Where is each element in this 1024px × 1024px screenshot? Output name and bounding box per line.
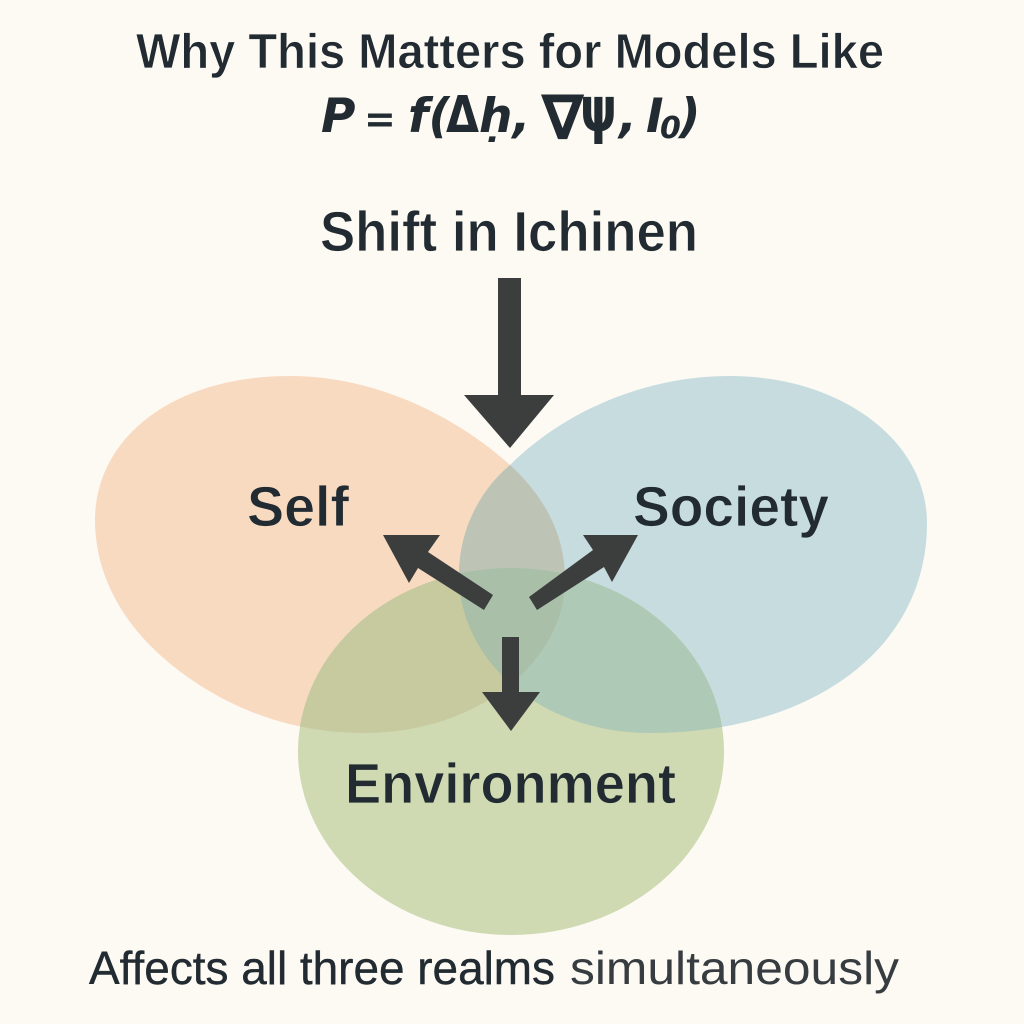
title: I — [646, 89, 664, 144]
caption: simultaneously — [570, 942, 899, 994]
title: , — [617, 89, 637, 144]
overlap: self and environment — [300, 580, 502, 733]
title: ) — [677, 89, 700, 144]
overlap: self and society — [459, 465, 565, 573]
arrow: to society — [529, 535, 638, 610]
arrow: to environment — [482, 637, 540, 731]
circle: society — [459, 376, 927, 733]
title: f( — [408, 89, 450, 144]
title: = — [364, 97, 396, 141]
title: P — [321, 89, 355, 144]
circle: environment — [298, 568, 724, 935]
label: environment: Environment — [345, 752, 676, 816]
venn diagram — [95, 376, 927, 935]
arrow: to self — [383, 535, 493, 610]
caption — [89, 942, 899, 994]
title: ḥ, — [479, 89, 530, 144]
label: society: Society — [633, 475, 829, 539]
title: ∇ — [541, 81, 585, 154]
overlap: society and environment — [519, 580, 722, 733]
label: self: Self — [247, 475, 350, 539]
title: Why This Matters for Models Like — [136, 25, 884, 79]
title: 0 — [660, 111, 681, 146]
circle: self — [95, 376, 565, 733]
overlap: all three — [460, 568, 564, 676]
title: Δ — [446, 86, 479, 145]
arrow: down from shift to venn — [464, 278, 554, 448]
title: ψ — [580, 73, 617, 146]
title — [136, 25, 884, 154]
heading: shift in ichinen: Shift in Ichinen — [320, 200, 698, 264]
caption: Affects all three realms — [89, 942, 555, 994]
